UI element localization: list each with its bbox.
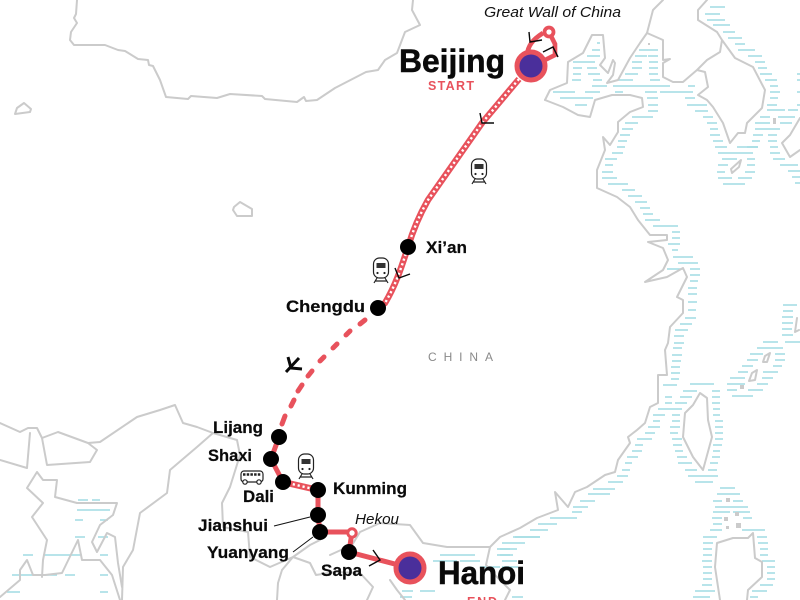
label: Shaxi: Shaxi xyxy=(208,446,252,465)
border: north-east India xyxy=(122,433,213,600)
sea hatching: Ryukyu and Japan xyxy=(727,305,800,396)
stop: Hekou xyxy=(348,529,356,537)
label: Yuanyang: Yuanyang xyxy=(207,543,289,562)
island: Luzon xyxy=(715,533,762,600)
stop: Great Wall xyxy=(544,28,554,36)
route: Chengdu to Lijang flight xyxy=(282,320,365,424)
label: START: START xyxy=(428,79,474,93)
border: Himalaya xyxy=(0,405,320,567)
route: Great Wall loop xyxy=(527,32,555,61)
route: Kunming to Hanoi road xyxy=(318,490,410,568)
icon: plane xyxy=(286,357,302,372)
stop: Beijing xyxy=(517,52,545,80)
icon: train near Kunming xyxy=(298,454,314,479)
border: Bay of Bengal coast xyxy=(0,540,120,600)
sea hatching: north-east band xyxy=(705,7,800,183)
border: northern China xyxy=(70,0,420,102)
leader lines xyxy=(274,517,313,552)
border: Laos and Vietnam xyxy=(277,557,405,600)
label: CHINA: CHINA xyxy=(428,350,493,364)
route: Beijing to Chengdu rail xyxy=(378,79,519,308)
label: Beijing: Beijing xyxy=(399,43,505,79)
direction arrows xyxy=(369,32,558,566)
label: Jianshui: Jianshui xyxy=(198,516,268,535)
label: Kunming: Kunming xyxy=(333,479,407,498)
label: Lijang: Lijang xyxy=(213,418,263,437)
label: Great Wall of China: Great Wall of China xyxy=(484,4,621,21)
sea hatching xyxy=(553,43,758,294)
label: Hekou: Hekou xyxy=(355,511,400,528)
route: road Lijang to Dali xyxy=(271,437,283,482)
label: Sapa: Sapa xyxy=(321,561,363,580)
border: Korea xyxy=(647,0,765,143)
route: Dali to Kunming rail xyxy=(283,482,318,490)
island: Taiwan xyxy=(683,393,712,470)
border: Bhutan xyxy=(0,433,97,468)
label: Xi'an: Xi’an xyxy=(426,238,467,257)
label: Chengdu: Chengdu xyxy=(286,297,365,316)
island: Kyushu xyxy=(782,118,800,332)
small islands xyxy=(648,43,776,529)
icon: train near Chengdu xyxy=(374,258,388,283)
island: Xinjiang lake 1 xyxy=(15,103,31,114)
island: lake 2 xyxy=(233,202,252,216)
stops: black dots xyxy=(263,239,416,560)
icon: train near Beijing xyxy=(472,159,486,184)
border: China south coast xyxy=(330,95,687,555)
label: Dali: Dali xyxy=(243,487,274,506)
island: Ryukyu xyxy=(749,353,770,381)
sea hatching: south xyxy=(500,302,775,597)
island: Jeju xyxy=(731,160,741,173)
label: Hanoi: Hanoi xyxy=(438,555,525,591)
border: Vietnam coast xyxy=(486,547,510,600)
icon: bus xyxy=(241,471,263,484)
sea hatching: Gulf of Tonkin and Bay of Bengal xyxy=(7,500,540,597)
stop: Hanoi xyxy=(396,554,424,582)
border: Yellow Sea coast xyxy=(545,0,663,100)
border: Bangladesh xyxy=(27,472,122,587)
